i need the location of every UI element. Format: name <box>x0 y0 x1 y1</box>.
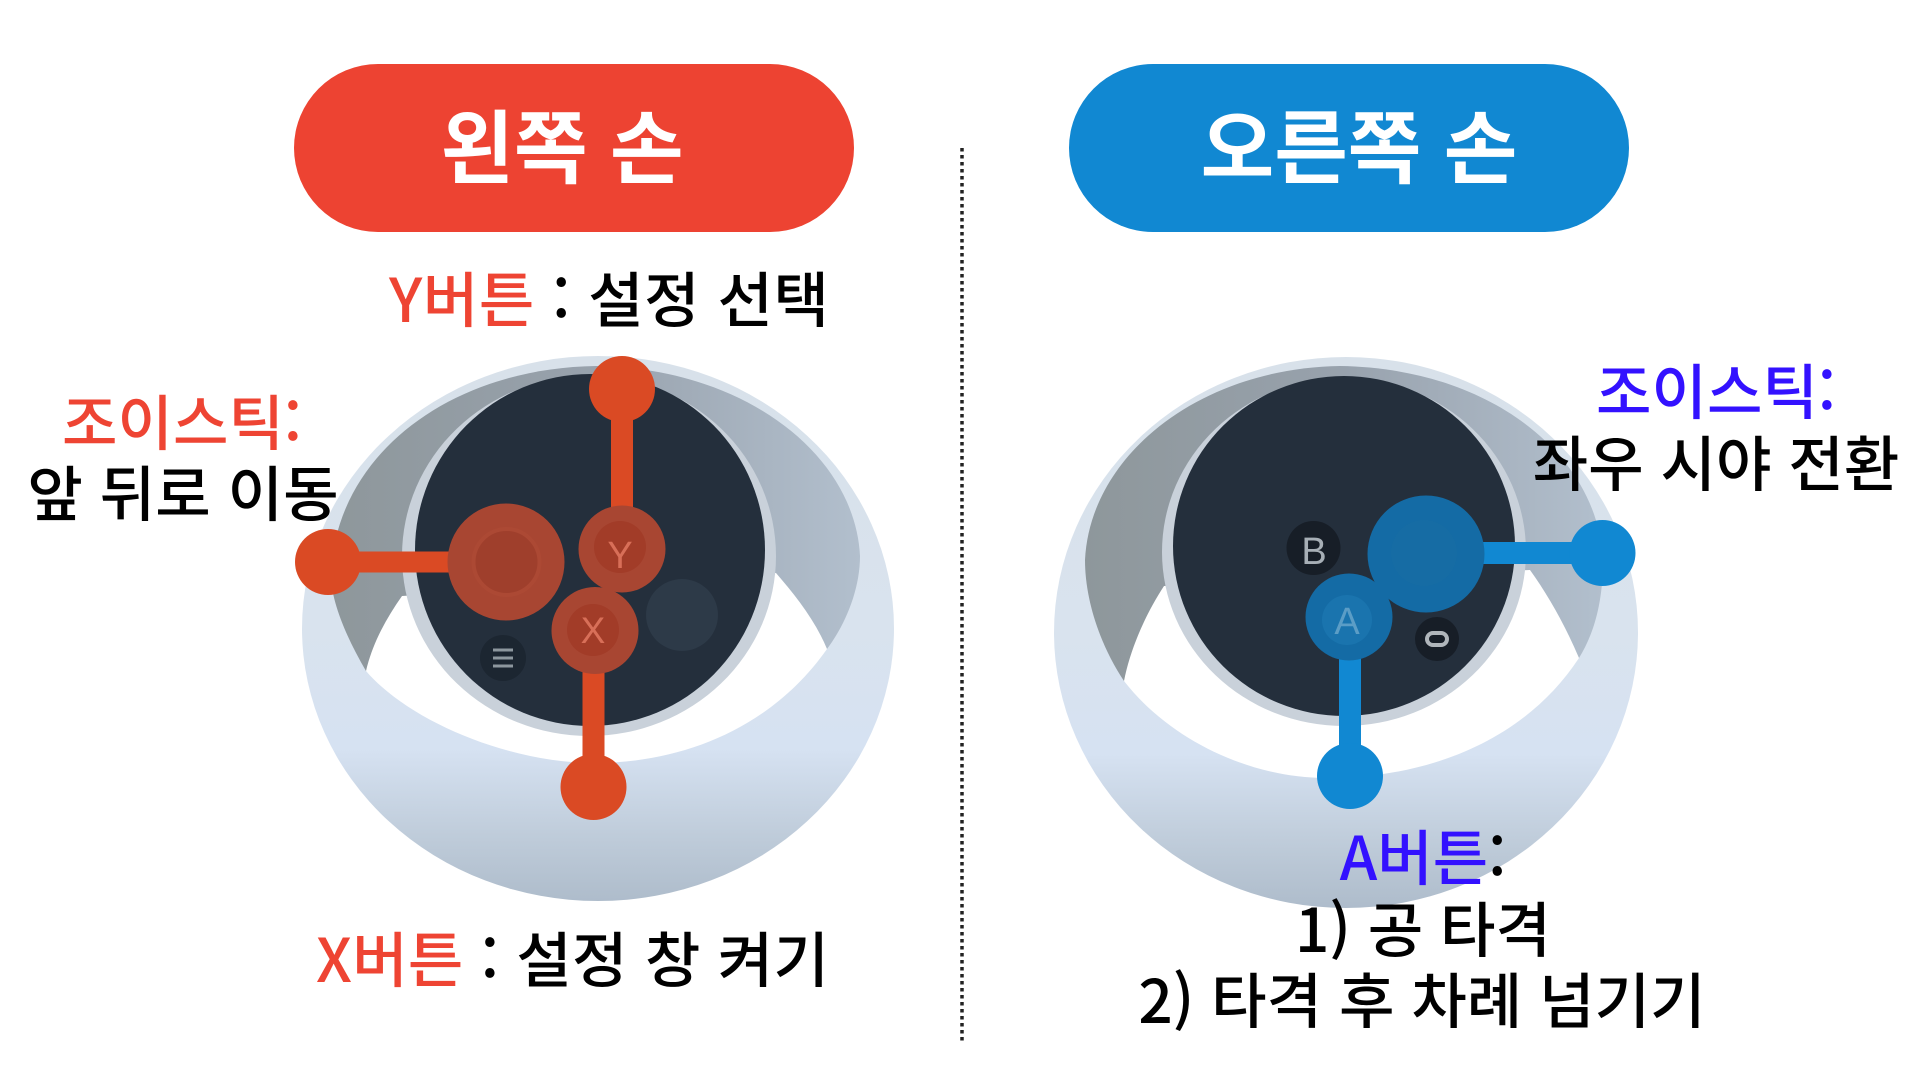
label: A button <box>1138 811 1706 1041</box>
label: left joystick <box>27 376 339 534</box>
right controller photo <box>1054 357 1638 908</box>
left controller photo <box>302 356 894 901</box>
label: left joystick: 조이스틱: <box>62 376 302 463</box>
header: right hand <box>1069 64 1629 232</box>
left callout: X button marker: X <box>581 610 605 651</box>
left callout: Y button marker: Y <box>607 535 633 577</box>
header: left hand: 왼쪽 손 <box>440 85 684 201</box>
label: A button: A버튼: <box>1340 811 1506 898</box>
label: right joystick: 조이스틱: <box>1596 345 1836 432</box>
button: B: B <box>1301 531 1327 573</box>
label: Y button: Y버튼 : 설정 선택 <box>388 253 829 340</box>
label: A button: 1) 공 타격 <box>1295 883 1551 970</box>
label: right joystick <box>1533 345 1899 504</box>
label: A button: 2) 타격 후 차례 넘기기 <box>1138 954 1706 1041</box>
right callout: A button marker <box>1306 574 1392 809</box>
left callout: joystick marker <box>295 504 564 620</box>
label: left joystick: 앞 뒤로 이동 <box>27 447 339 534</box>
header: left hand <box>294 64 854 232</box>
right callout: A button marker: A <box>1334 601 1360 643</box>
label: X button: X버튼 : 설정 창 켜기 <box>316 913 829 1000</box>
button: B <box>1286 521 1340 575</box>
header: right hand: 오른쪽 손 <box>1201 85 1517 201</box>
left callout: Y button marker <box>578 356 666 592</box>
center dotted divider <box>960 148 964 1043</box>
label: right joystick: 좌우 시야 전환 <box>1533 417 1899 504</box>
right callout: joystick marker <box>1368 496 1636 612</box>
left callout: X button marker <box>552 587 638 820</box>
button: Oculus <box>1415 617 1459 661</box>
